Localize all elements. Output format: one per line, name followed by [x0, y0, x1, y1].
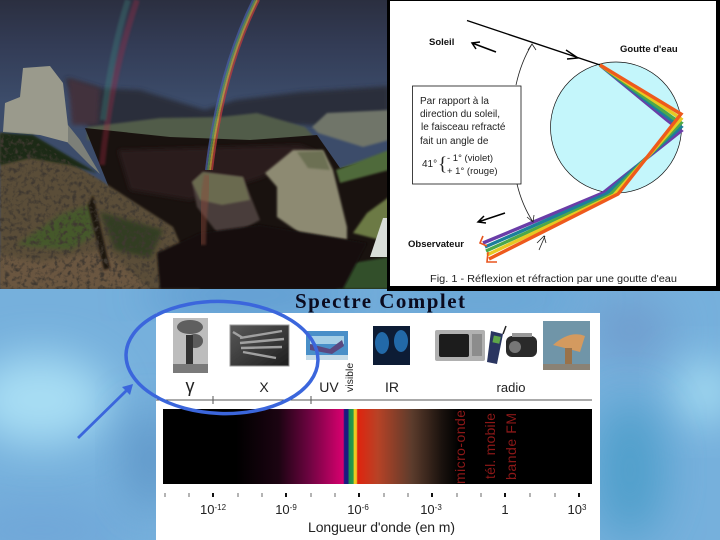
band axis [156, 396, 592, 404]
explanation box: { [438, 154, 447, 175]
wavelength labels: -12 [214, 503, 227, 512]
blue cloudy background [0, 283, 720, 540]
image: hand x-ray [230, 325, 289, 366]
wavelength labels: -9 [290, 503, 297, 512]
wavelength labels: 10 [275, 502, 290, 517]
highlight ellipse around gamma and X rays [124, 298, 320, 417]
label: Soleil: Soleil [429, 37, 454, 48]
image: mobile phone [487, 326, 506, 364]
explanation box: - 1° (violet) [447, 153, 493, 164]
arrow pointing to the ellipse [78, 384, 133, 438]
image: radio telescope dish [543, 321, 590, 370]
right green slopes [336, 150, 389, 183]
waterfall [370, 218, 388, 257]
wavelength axis ticks [213, 493, 579, 497]
sunlit middle slope [86, 112, 313, 141]
wavelength labels: 10 [420, 502, 435, 517]
half dome cliff [3, 66, 70, 143]
label: Observateur: Observateur [408, 239, 464, 250]
secondary rainbow [102, 0, 137, 165]
photo: double rainbow over mountains [0, 0, 389, 289]
image: mushroom cloud [173, 318, 208, 373]
water drop circle [550, 62, 682, 193]
band label: UV: UV [319, 379, 339, 395]
explanation box: le faisceau refracté [421, 122, 506, 133]
label: Goutte d'eau: Goutte d'eau [620, 44, 678, 55]
explanation box: fait un angle de [420, 136, 489, 147]
foreground mountain [0, 133, 200, 289]
direction arrows [472, 42, 505, 223]
wavelength labels: 10 [200, 502, 214, 517]
observer arrowheads [480, 236, 497, 262]
wavelength labels: -3 [435, 503, 442, 512]
image: infrared hands [373, 326, 410, 365]
explanation box: Par rapport à la [420, 96, 489, 107]
far right rock [312, 110, 389, 147]
figure caption: Fig. 1 - Réflexion et réfraction par une goutte d'eau [430, 274, 677, 285]
title: Spectre Complet [295, 289, 465, 313]
spectrum bar [163, 409, 592, 484]
explanation box: 41° [422, 159, 437, 170]
image: UV tanning bed [306, 331, 348, 360]
band label: gamma: γ [186, 376, 194, 396]
wavelength labels: -6 [362, 503, 369, 512]
central dome rock [192, 172, 260, 232]
panel: water droplet diagram [387, 0, 720, 291]
band label: IR: IR [385, 379, 399, 395]
primary rainbow [206, 0, 259, 170]
wavelength axis minor ticks [165, 493, 555, 497]
band label: radio: radio [497, 380, 525, 395]
band label: X: X [259, 379, 269, 395]
wavelength labels: 10 [347, 502, 362, 517]
panel: electromagnetic spectrum chart [156, 313, 600, 540]
axis title: Longueur d'onde (en m) [308, 519, 455, 535]
label: micro-onde: micro-onde [452, 410, 468, 484]
label: tel. mobile: tél. mobile [482, 413, 498, 479]
distant ridge [65, 78, 389, 130]
band label: visible: visible [344, 363, 356, 392]
rainbow beams through the drop [483, 65, 681, 259]
dark shadowed valley [85, 128, 389, 289]
image: boombox [506, 333, 537, 357]
explanation box [412, 86, 521, 184]
wavelength labels: 10 [568, 502, 582, 517]
explanation box: + 1° (rouge) [447, 166, 498, 177]
wavelength labels [200, 502, 587, 517]
wavelength labels: 1 [501, 502, 509, 517]
image: television [435, 330, 485, 361]
wavelength labels: 3 [582, 503, 587, 512]
label: bande FM: bande FM [503, 413, 519, 480]
angle arc [516, 44, 546, 250]
explanation box: direction du soleil, [420, 109, 500, 120]
incoming sun ray [467, 20, 600, 65]
right dome rock [265, 150, 347, 240]
